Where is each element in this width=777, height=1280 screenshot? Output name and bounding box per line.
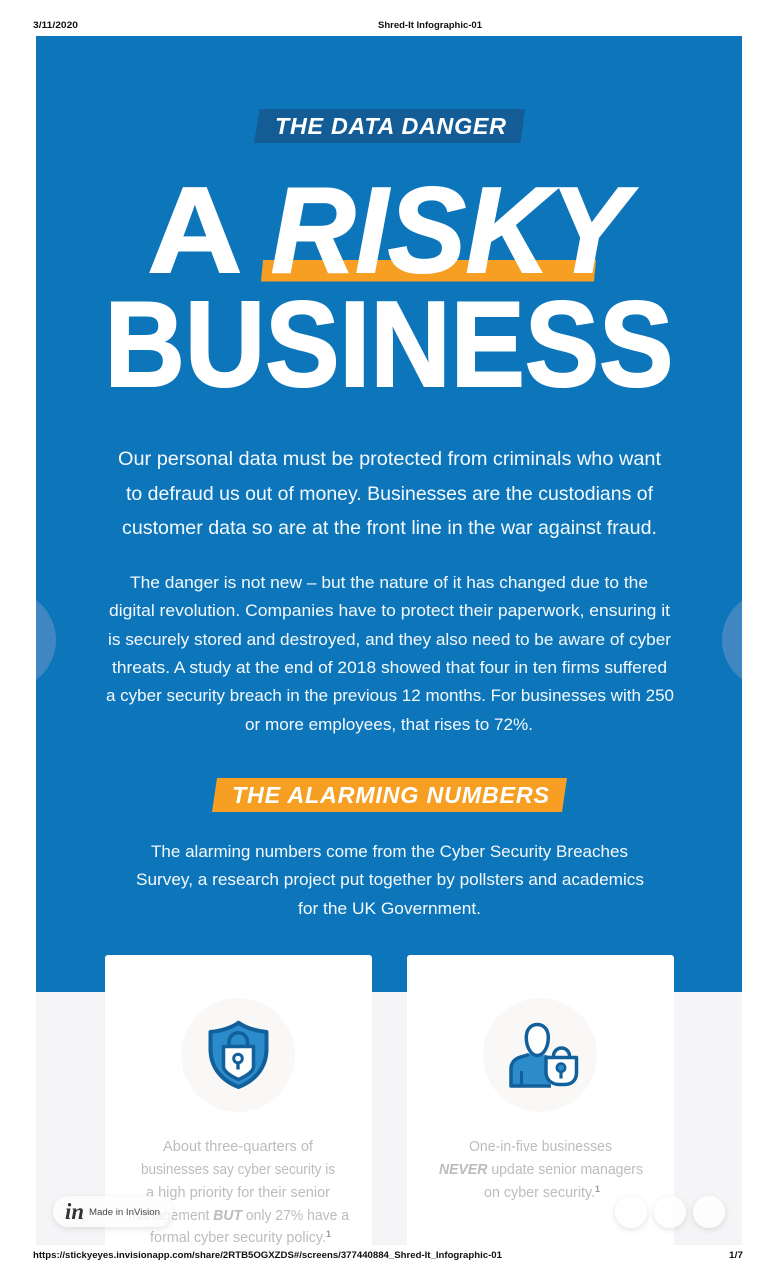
intro paragraph: [118, 448, 662, 539]
made in invision badge: in: [65, 1199, 84, 1224]
print footer: https://stickyeyes.invisionapp.com/share/2RTB5OGXZDS#/screens/377440884_Shred-It_Infographic-01: [33, 1250, 502, 1260]
body paragraph: threats. A study at the end of 2018 showed that four in ten firms suffered: [112, 659, 667, 677]
card text: One-in-five businesses: [469, 1139, 612, 1155]
card text: management BUT only 27% have a: [128, 1208, 350, 1224]
banner: the alarming numbers: THE ALARMING NUMBERS: [232, 782, 549, 808]
survey paragraph: Survey, a research project put together by pollsters and academics: [136, 871, 644, 889]
print footer: 1/7: [729, 1250, 743, 1260]
body paragraph: a cyber security breach in the previous 12 months. For businesses with 250: [106, 687, 674, 705]
card text: formal cyber security policy.: [150, 1230, 328, 1246]
icon: person with padlock: [509, 1022, 578, 1088]
viewer control buttons: [615, 1196, 725, 1228]
blue background panel: [36, 36, 742, 992]
card text: [128, 1139, 350, 1246]
survey paragraph: [136, 843, 644, 918]
left carousel arrow circle: [36, 600, 56, 680]
card text: on cyber security.: [484, 1185, 597, 1201]
body paragraph: digital revolution. Companies have to protect their paperwork, ensuring it: [109, 602, 670, 620]
title: a risky business: BUSINESS: [104, 275, 673, 412]
card text: 1: [326, 1229, 331, 1239]
card text: businesses say cyber security is: [141, 1162, 335, 1178]
body paragraph: is securely stored and destroyed, and they also need to be aware of cyber: [108, 631, 672, 649]
card text: 1: [595, 1184, 600, 1194]
card text: [439, 1139, 643, 1201]
banner: the alarming numbers: [212, 778, 567, 812]
made in invision badge: [53, 1196, 173, 1227]
banner: the data danger: THE DATA DANGER: [275, 113, 506, 139]
card text: About three-quarters of: [163, 1139, 314, 1155]
intro paragraph: customer data so are at the front line in the war against fraud.: [122, 517, 657, 539]
survey paragraph: The alarming numbers come from the Cyber Security Breaches: [151, 843, 628, 861]
print footer: [33, 1250, 743, 1260]
body paragraph: The danger is not new – but the nature of it has changed due to the: [130, 574, 648, 592]
card: senior managers: [407, 955, 674, 1255]
made in invision badge: Made in InVision: [89, 1207, 160, 1217]
survey paragraph: for the UK Government.: [298, 900, 481, 918]
card: cyber security priority: [105, 955, 372, 1255]
title: a risky business: RISKY: [271, 163, 637, 299]
body paragraph: [106, 574, 674, 734]
card text: NEVER update senior managers: [439, 1162, 643, 1178]
intro paragraph: to defraud us out of money. Businesses are the custodians of: [126, 483, 654, 505]
intro paragraph: Our personal data must be protected from criminals who want: [118, 448, 662, 470]
print header: [33, 20, 482, 30]
title: a risky business: A: [148, 161, 242, 298]
title: a risky business: [111, 186, 670, 388]
card text: a high priority for their senior: [146, 1185, 330, 1201]
print header: 3/11/2020: [33, 20, 78, 30]
right carousel arrow circle: [722, 600, 742, 680]
banner: the data danger: [254, 109, 525, 143]
body paragraph: or more employees, that rises to 72%.: [245, 716, 533, 734]
icon: shield with padlock: [208, 1020, 268, 1089]
print header: Shred-It Infographic-01: [378, 20, 482, 30]
grey lower background: [36, 992, 742, 1245]
